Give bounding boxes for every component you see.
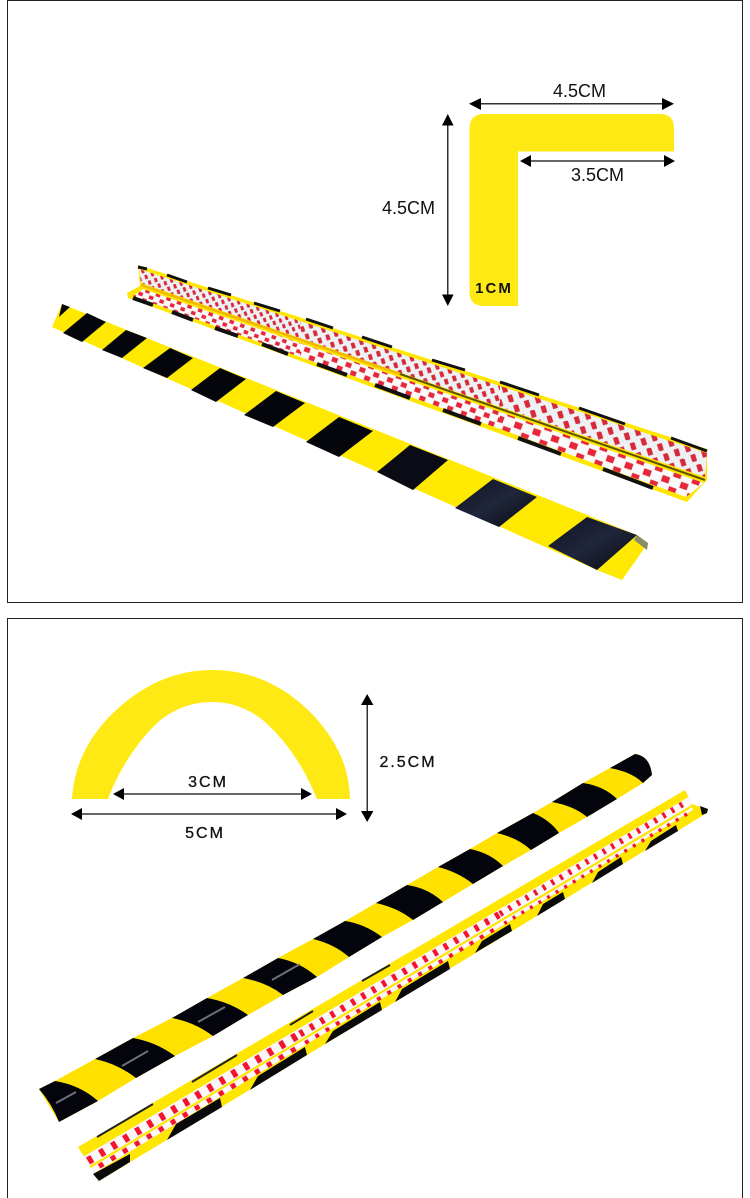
arrow: height [361, 694, 373, 822]
strip body [78, 790, 708, 1181]
arrow: inner width [113, 788, 312, 800]
L profile shape [470, 114, 674, 306]
arrow: height [442, 114, 454, 306]
panel: bottom product frame [8, 618, 742, 1198]
tape upper row of red marks [88, 801, 688, 1161]
label: thickness: 1CM [475, 280, 513, 297]
fold line [141, 285, 705, 480]
label: height: 2.5CM [379, 754, 437, 771]
highlight on black stripes [56, 964, 300, 1103]
upper rim dark dashes [97, 965, 390, 1137]
top rim black dashes [138, 267, 707, 451]
diagram: arch profile with dimensions [71, 670, 437, 842]
product: round striped strip [39, 754, 652, 1122]
strip body [39, 754, 652, 1122]
lower wing tape [133, 289, 704, 497]
arrow: top width [469, 98, 674, 110]
black stripes [59, 304, 637, 570]
arrow: inner width [520, 155, 675, 167]
label: inner width: 3CM [188, 774, 228, 791]
label: outer width: 5CM [185, 825, 225, 842]
tape white backing [83, 796, 693, 1174]
upper wing tape [139, 269, 707, 477]
center yellow line [90, 806, 692, 1167]
strip body [127, 265, 707, 502]
bottom rim black dashes [133, 298, 653, 488]
product: open angle strip with adhesive tape [127, 265, 707, 502]
panel: top product frame [8, 0, 742, 602]
arch profile shape [72, 670, 350, 799]
product: open round strip with adhesive tape [78, 790, 708, 1181]
arrow: outer width [71, 808, 347, 820]
label: height: 4.5CM [382, 198, 435, 218]
lower rim black dashes [93, 806, 708, 1181]
label: inner width: 3.5CM [571, 165, 624, 185]
tape lower row of red marks [93, 811, 692, 1170]
label: top width: 4.5CM [553, 81, 606, 101]
diagram: L-shaped profile with dimensions [382, 81, 675, 306]
end cap [634, 535, 648, 550]
black stripes [39, 754, 652, 1122]
product: striped angle strip, front view [52, 304, 648, 580]
strip body [52, 304, 648, 580]
